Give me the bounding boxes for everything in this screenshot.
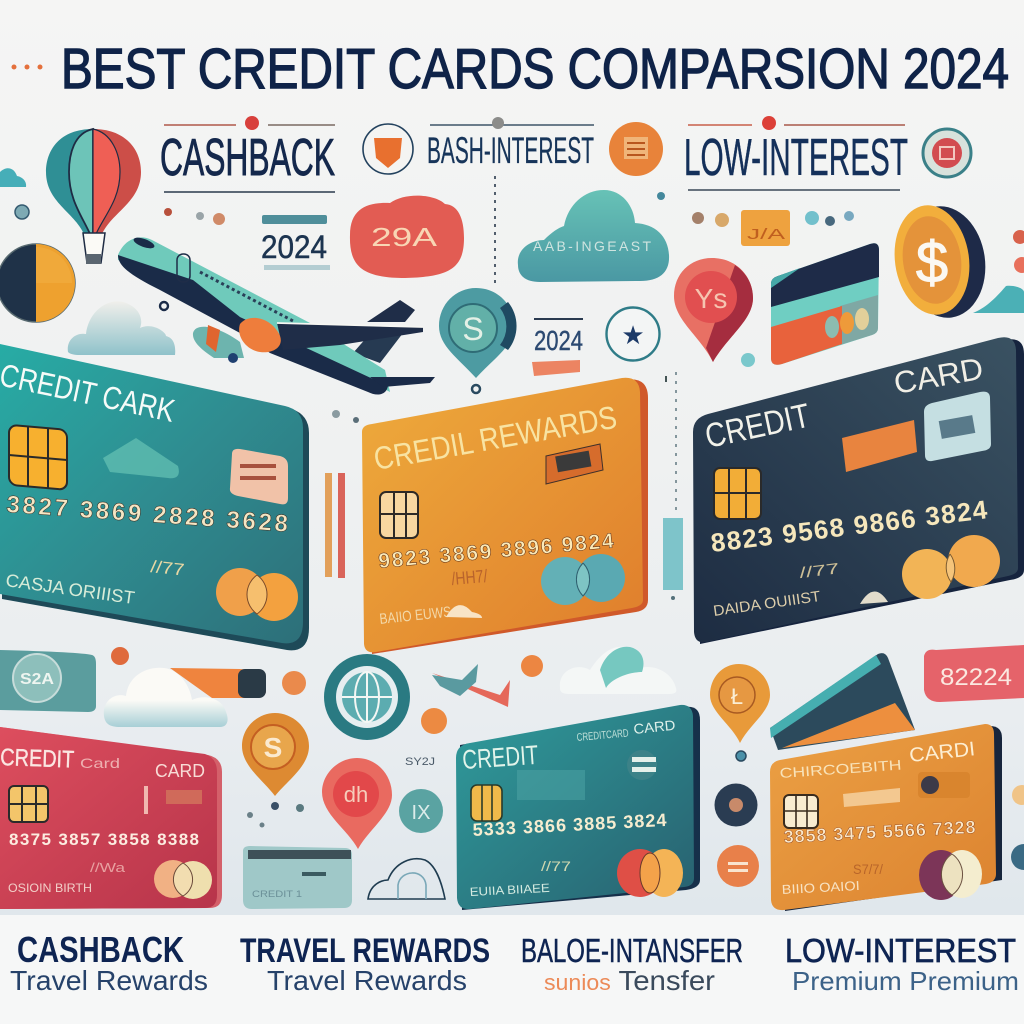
white teal cloud (560, 647, 676, 694)
calendar small 2024: 2024 (534, 325, 583, 356)
small decorative marks (164, 208, 225, 225)
card: red credit card: CARD (155, 761, 205, 781)
card: dark credit card (693, 337, 1024, 644)
map pin: teal dollar: S (462, 311, 484, 347)
card: teal bottom card: CREDIT (461, 740, 539, 775)
dotted connector (494, 176, 496, 285)
orange small circle (282, 671, 306, 695)
bottom label strip background (0, 915, 1024, 1024)
small icons row right (657, 192, 854, 227)
white cloud with orange card (104, 668, 266, 727)
card: red credit card (0, 727, 222, 909)
calendar 2024 (261, 215, 330, 270)
card: orange rewards card: BAIIO EUWS (379, 604, 452, 628)
map pin: teal dollar (439, 288, 517, 393)
heading: balance transfer (427, 117, 594, 171)
map pin: orange right (710, 664, 770, 761)
card: red credit card: OSIOIN BIRTH (8, 881, 92, 895)
heading: low-interest (684, 116, 908, 190)
bottom label: balance transfer: BALOE-INTANSFER (521, 932, 743, 969)
teal circle badge: IX (412, 802, 430, 824)
map pin: red: Ys (695, 283, 727, 314)
orange mini card: J/A (747, 226, 785, 243)
orange small badge (111, 647, 129, 665)
bottom label: cashback: Travel Rewards (10, 965, 208, 996)
chip (784, 795, 818, 828)
card: teal credit card: 3827 3869 2828 3628 (6, 491, 289, 538)
vertical accent bars (325, 473, 345, 578)
small muted card (243, 846, 352, 909)
card network logo (919, 850, 982, 900)
chip (471, 785, 502, 821)
chip (9, 786, 48, 822)
card: red credit card: Card (80, 755, 120, 771)
card: dark credit card: CREDIT (702, 397, 813, 456)
bottom label: travel rewards (240, 932, 490, 996)
card: red credit card: CREDIT (0, 744, 75, 774)
teal 2024 tag (0, 650, 96, 712)
card network logo (902, 535, 1000, 599)
dark and orange circles (714, 784, 759, 887)
dollar coin: $ (916, 230, 948, 295)
card: teal credit card: CASJA ORIIIST (4, 570, 136, 608)
card: red credit card: 8375 3857 3858 8388 (9, 830, 199, 849)
bottom label: travel rewards: TRAVEL REWARDS (240, 932, 490, 970)
mini credit card (771, 243, 879, 365)
red 2024 badge: 29A (371, 222, 438, 252)
chip (380, 492, 418, 538)
card: orange rewards card (362, 378, 648, 654)
card: teal bottom card: //77 (541, 858, 571, 874)
card network logo (541, 554, 625, 605)
card network logo (216, 568, 298, 621)
card: orange bottom card: BIIIO OAIOI (781, 878, 860, 897)
card: teal bottom card: CREDITCARD (576, 727, 629, 744)
teal cloud label: AAB-INGEAST (533, 238, 652, 254)
icon: hot air balloon (46, 129, 141, 264)
orange small blobs (421, 655, 543, 734)
teal 2024 tag: S2A (20, 671, 54, 688)
icon: outlined cloud arch (368, 859, 445, 899)
icon: star circle (606, 308, 660, 360)
heading: cashback: CASHBACK (160, 129, 335, 187)
icon: shield badge (363, 124, 413, 174)
card: orange bottom card: 3858 3475 5566 7328 (783, 817, 976, 847)
card: teal bottom card: CARD (633, 717, 676, 737)
map pin: orange left: S (264, 732, 282, 763)
wallet cards behind orange card (770, 653, 915, 750)
card: orange bottom card: CHIRCOEBITH (779, 757, 902, 781)
airplane (118, 235, 435, 394)
icon: small bubble (15, 205, 29, 219)
bottom label: balance transfer (521, 932, 743, 996)
red 2024 tag (924, 645, 1024, 702)
small muted card: CREDIT 1 (252, 889, 302, 899)
bottom label: balance transfer: sunios Tensfer (544, 965, 715, 996)
chip (9, 425, 67, 490)
scattered small marks: SY2J (405, 756, 435, 768)
card network logo (617, 849, 683, 897)
bottom label: cashback: CASHBACK (17, 929, 184, 970)
scattered small marks (247, 756, 435, 828)
map pin: red center (322, 758, 392, 849)
small decorative marks center (332, 353, 755, 600)
card: orange rewards card: CREDIL REWARDS (371, 399, 619, 477)
card: dark credit card: //77 (798, 560, 840, 582)
map pin: orange right: Ł (731, 684, 743, 709)
teal circle badge (399, 789, 443, 833)
bottom label: low-interest (785, 932, 1019, 996)
icon: star circle: ★ (621, 320, 645, 350)
orange mini card (741, 210, 790, 246)
card: dark credit card: DAIDA OUIIIST (712, 588, 822, 620)
card: teal credit card: //77 (150, 557, 185, 580)
red 2024 badge (350, 196, 464, 278)
dollar coin (888, 200, 992, 323)
map pin: orange left (242, 713, 309, 796)
card: red credit card: //Wa (90, 860, 126, 875)
icon: red badge (923, 129, 971, 177)
calendar small 2024 (532, 319, 583, 376)
heading: cashback (160, 116, 335, 192)
card: teal credit card: CREDIT CARK (0, 357, 178, 429)
icon: cloud left of plane (68, 301, 175, 355)
red 2024 tag: 82224 (940, 664, 1012, 691)
heading: balance transfer: BASH-INTEREST (427, 130, 594, 171)
bottom label: low-interest: Premium Premium (792, 966, 1019, 996)
chip (714, 468, 761, 519)
calendar 2024: 2024 (261, 229, 327, 265)
right edge circle (1011, 785, 1024, 870)
card: teal credit card (0, 344, 309, 650)
icon: small cloud left (0, 168, 26, 187)
teal cloud label (518, 190, 669, 282)
card: teal bottom card (456, 705, 700, 910)
card: teal bottom card: EUIIA BIIAEE (469, 881, 550, 899)
card: dark credit card: 8823 9568 9866 3824 (709, 494, 989, 558)
bottom label: cashback (10, 929, 208, 996)
card: dark credit card: CARD (891, 351, 986, 401)
icon: pie coin (0, 244, 75, 322)
card: orange bottom card: S7/7/ (853, 861, 883, 877)
icon: small plane (432, 664, 510, 707)
icon: globe (324, 654, 410, 740)
bottom label: travel rewards: Travel Rewards (267, 965, 467, 996)
icon: right edge pieces (973, 230, 1024, 313)
card: orange bottom card (770, 724, 1002, 911)
map pin: red (674, 258, 753, 362)
card: orange bottom card: CARDI (908, 738, 976, 767)
card: orange rewards card: 9823 3869 3896 9824 (377, 529, 615, 573)
card network logo (154, 860, 212, 899)
card: teal bottom card: 5333 3866 3885 3824 (472, 810, 667, 840)
icon: orange document badge (609, 122, 663, 176)
card: orange rewards card: /HH7/ (451, 566, 488, 589)
map pin: red center: dh (344, 782, 368, 807)
